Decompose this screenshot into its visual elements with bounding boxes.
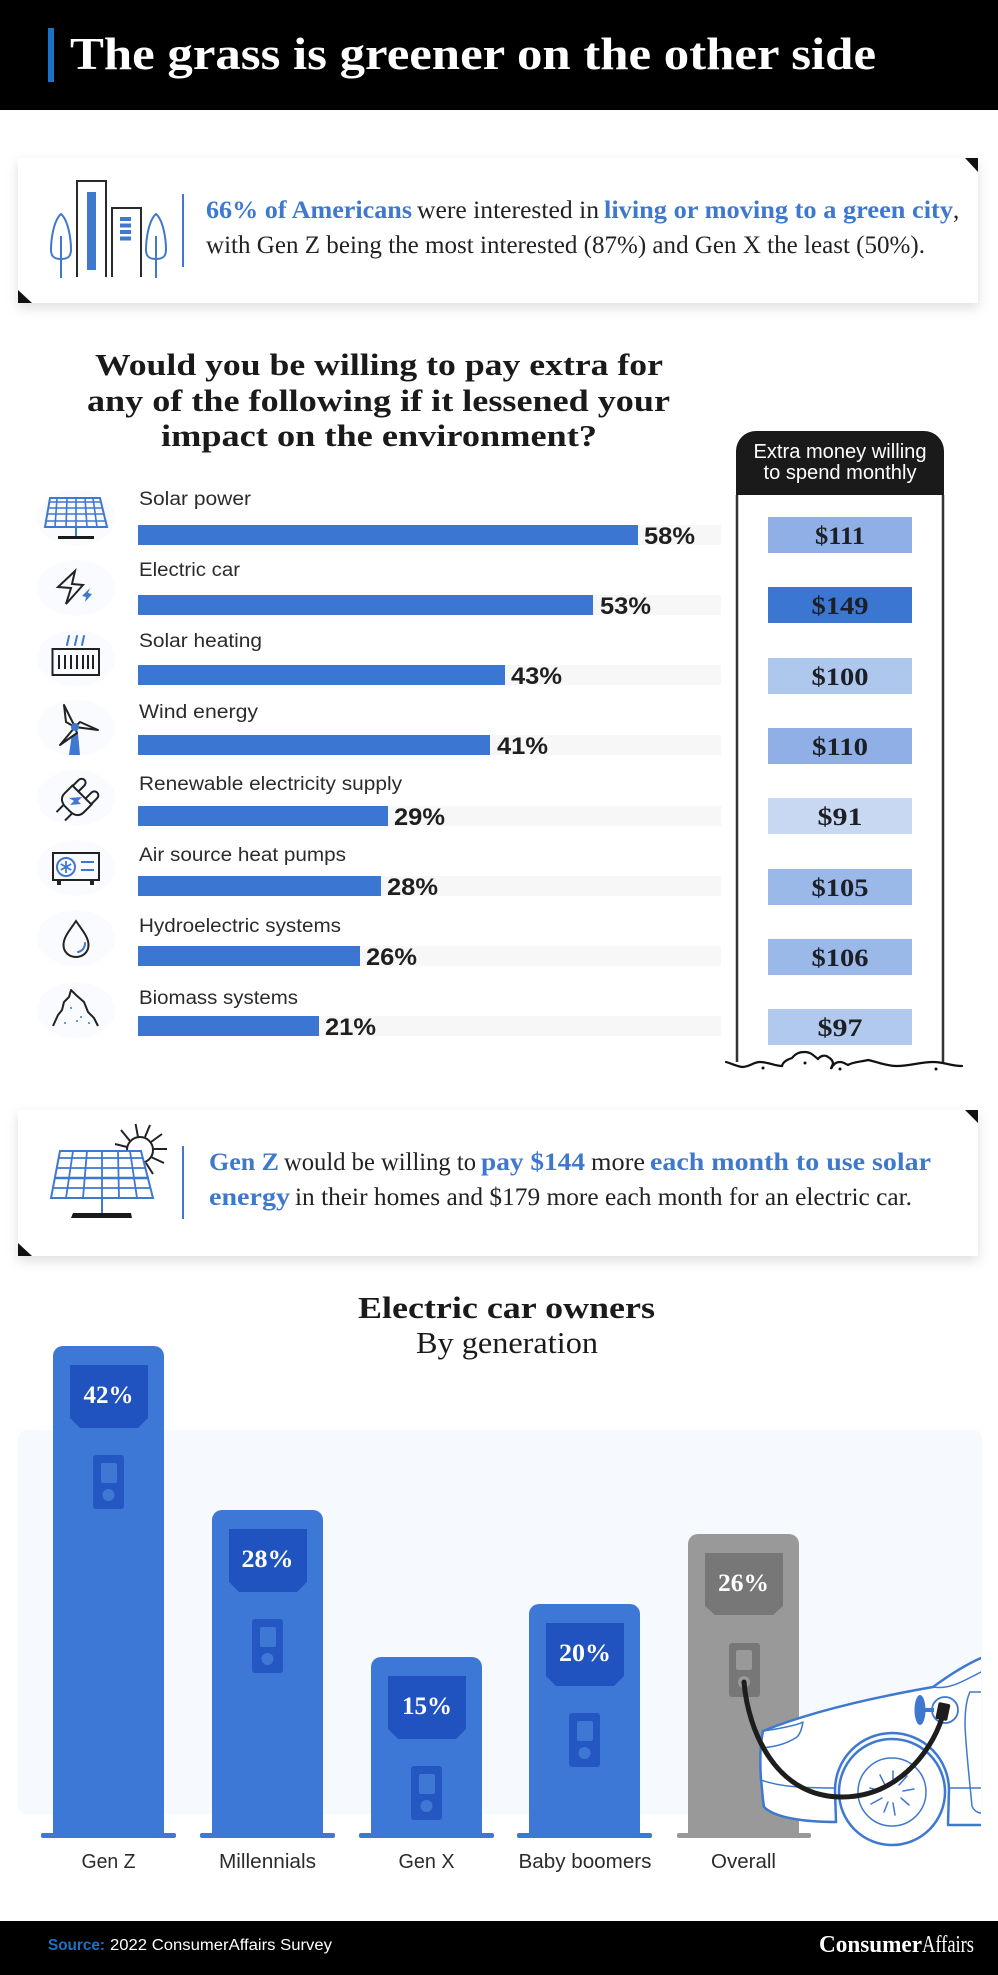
text: Gen Z willing to pay: in their homes and $179 more each month for an electric car.: [295, 1184, 912, 1211]
generation labels: Overall: [711, 1851, 776, 1873]
source note: 2022 ConsumerAffairs Survey: [110, 1937, 332, 1954]
value: air source heat pumps: [768, 869, 912, 905]
value: air source heat pumps: $105: [812, 875, 868, 902]
row: air source heat pumps: [138, 845, 721, 901]
row: air source heat pumps: 28%: [387, 874, 438, 901]
footer: [0, 1921, 998, 1975]
value: solar power: [768, 517, 912, 553]
row: hydroelectric systems: Hydroelectric systems: [139, 916, 341, 937]
value: solar heating: [768, 658, 912, 694]
row: renewable electricity supply: Renewable electricity supply: [139, 774, 403, 795]
row: solar power: Solar power: [139, 489, 252, 510]
row: solar heating: 43%: [511, 663, 562, 690]
text: Gen Z willing to pay: pay $144: [481, 1149, 586, 1176]
row: electric car: Electric car: [139, 560, 241, 581]
charger: Overall 26%: 26%: [718, 1570, 769, 1597]
heading: electric car owners: By generation: [416, 1325, 599, 1360]
row: wind energy: Wind energy: [139, 702, 259, 723]
bar chart: willing to pay extra: [138, 489, 721, 1041]
icon: wind turbine: [37, 700, 115, 756]
source note: Source:: [48, 1937, 105, 1954]
value: wind energy: $110: [812, 734, 868, 761]
text: Gen Z willing to pay: [209, 1149, 931, 1211]
logo: ConsumerAffairs: Consumer: [819, 1932, 922, 1958]
callout: green city: [18, 158, 978, 303]
title: The grass is greener on the other side: [70, 29, 876, 79]
value: hydroelectric: $106: [812, 945, 868, 972]
text: 66% of Americans: ,: [953, 197, 959, 224]
text: 66% of Americans: living or moving to a green city: [604, 197, 954, 224]
row: renewable electricity supply: [138, 774, 721, 831]
charger: Gen X 15%: [359, 1657, 494, 1838]
row: wind energy: [138, 702, 721, 760]
generation labels: Gen X: [398, 1851, 454, 1873]
text: 66% of Americans: with Gen Z being the most interested (87%) and Gen X the least (50%).: [206, 232, 925, 259]
icon: electric bolt: [37, 560, 115, 616]
icon: solar panel: [37, 490, 115, 546]
icon: water drop: [37, 910, 115, 966]
row: electric car: 53%: [600, 593, 651, 620]
callout: Gen Z solar: [18, 1110, 978, 1256]
text: Gen Z willing to pay: each month to use solar: [650, 1149, 931, 1176]
value: electric car: [768, 587, 912, 623]
header banner: [0, 0, 998, 110]
text: Gen Z willing to pay: more: [591, 1149, 645, 1176]
charger: Overall 26%: [677, 1534, 811, 1838]
value: hydroelectric: [768, 939, 912, 975]
row: wind energy: 41%: [497, 733, 548, 760]
icon: biomass pile: [37, 982, 115, 1038]
row: air source heat pumps: Air source heat pumps: [139, 845, 346, 866]
panel heading: [754, 441, 926, 484]
heading: electric car owners: Electric car owners: [358, 1290, 655, 1325]
value: renewable electricity: $91: [818, 804, 862, 831]
row: solar power: [138, 489, 721, 550]
text: 66% of Americans: [206, 197, 959, 259]
generation labels: Gen Z: [82, 1851, 136, 1873]
heading: electric car owners: [358, 1290, 655, 1360]
icon: city buildings and trees: [51, 181, 166, 278]
chart background band: [18, 1430, 982, 1814]
heading: willingness question: [87, 347, 670, 453]
row: biomass systems: [138, 988, 721, 1041]
text: Gen Z willing to pay: Gen Z: [209, 1149, 279, 1176]
generation labels: Baby boomers: [518, 1851, 652, 1873]
text: Gen Z willing to pay: energy: [209, 1184, 291, 1211]
row: biomass systems: Biomass systems: [139, 988, 298, 1009]
text: Gen Z willing to pay: would be willing to: [284, 1149, 476, 1176]
charger: Gen X 15%: 15%: [402, 1693, 452, 1720]
heading: willingness question: any of the following if it lessened your: [87, 383, 670, 418]
row: solar heating: [138, 631, 721, 690]
charger: Baby boomers 20%: 20%: [559, 1640, 611, 1667]
heading: willingness question: impact on the environment?: [161, 418, 597, 453]
icon: solar panel with sun: [51, 1124, 167, 1218]
value: biomass: [768, 1009, 912, 1045]
text: 66% of Americans: 66% of Americans: [206, 197, 412, 224]
icon: electric plug: [37, 770, 115, 826]
row: renewable electricity supply: 29%: [394, 804, 445, 831]
generation labels: [82, 1851, 776, 1873]
row: electric car: [138, 560, 721, 620]
value: electric car: $149: [812, 593, 868, 620]
row: solar power: 58%: [644, 523, 695, 550]
panel: extra money willing to spend monthly: [726, 431, 962, 1070]
value: biomass: $97: [818, 1015, 862, 1042]
heading: willingness question: Would you be willing to pay extra for: [95, 347, 663, 382]
logo: ConsumerAffairs: [819, 1932, 974, 1958]
text: 66% of Americans: were interested in: [417, 197, 600, 224]
wavy ground line: [726, 1052, 962, 1070]
icon: air source heat pump: [37, 840, 115, 896]
charger: Baby boomers 20%: [517, 1604, 652, 1838]
value: renewable electricity: [768, 798, 912, 834]
charger bar chart: electric car owners by generation: [41, 1346, 811, 1873]
value: solar power: $111: [815, 523, 865, 550]
value: wind energy: [768, 728, 912, 764]
row: hydroelectric systems: 26%: [366, 944, 417, 971]
row: biomass systems: 21%: [325, 1014, 376, 1041]
panel heading: Extra money willing: [754, 441, 926, 463]
value: solar heating: $100: [812, 664, 868, 691]
panel heading: to spend monthly: [764, 462, 916, 484]
row: hydroelectric systems: [138, 916, 721, 971]
generation labels: Millennials: [219, 1851, 316, 1873]
charger: Millennials 28%: [200, 1510, 335, 1838]
charger: Millennials 28%: 28%: [242, 1546, 294, 1573]
charger: Gen Z 42%: [41, 1346, 176, 1838]
logo: ConsumerAffairs: Affairs: [922, 1932, 974, 1958]
icon: solar heating: [37, 630, 115, 686]
charger: Gen Z 42%: 42%: [84, 1382, 134, 1409]
row: solar heating: Solar heating: [139, 631, 262, 652]
illustration: car being charged: [744, 1658, 981, 1845]
